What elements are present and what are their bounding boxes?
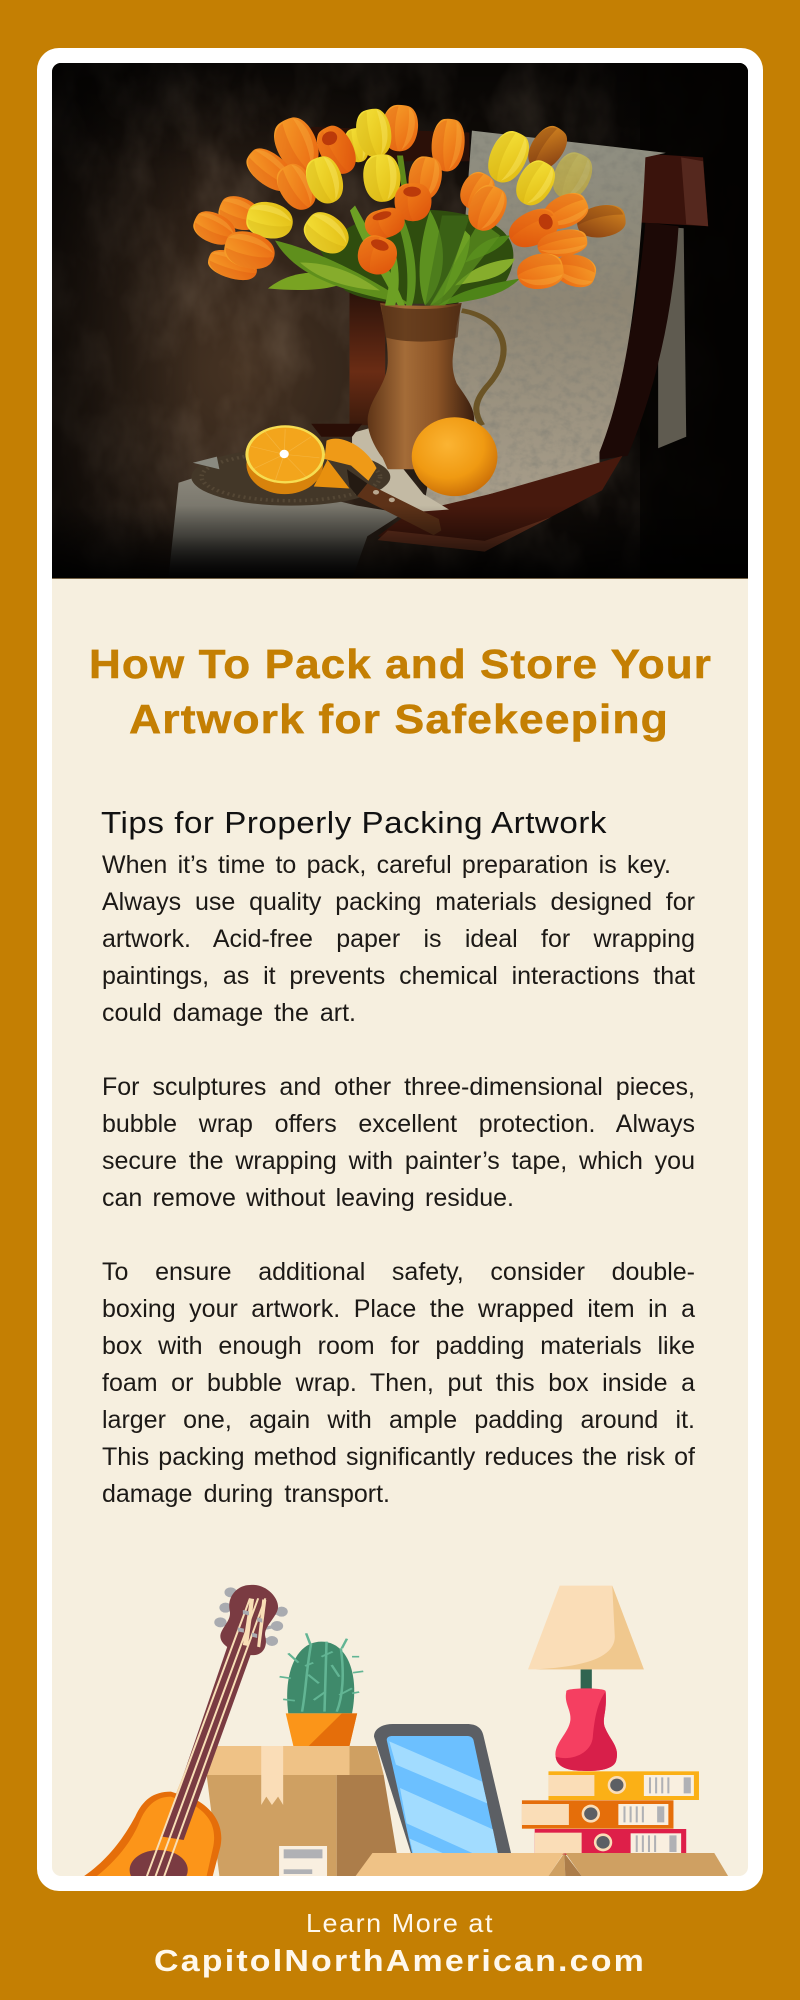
paragraph: sculptures and bubble wrap: bubble wrap offers excellent protection. Always <box>102 1110 695 1138</box>
icon: table lamp <box>528 1586 644 1771</box>
paragraph: packing materials: When it’s time to pack, careful preparation is key. <box>102 851 671 879</box>
title: How To Pack and Store Your <box>89 641 712 687</box>
tulips <box>189 103 628 292</box>
title <box>89 641 712 742</box>
paragraph: packing materials: could damage the art. <box>102 999 356 1027</box>
footer call to action: CapitolNorthAmerican.com <box>154 1943 646 1978</box>
icon: acoustic guitar <box>84 1585 288 1890</box>
cream content panel <box>52 62 748 1876</box>
paragraph: packing materials <box>102 851 695 1027</box>
photo background objects drawn in scaled coordinates <box>168 126 708 579</box>
paragraph: double-boxing: To ensure additional safety, consider double- <box>102 1258 695 1286</box>
paragraph: double-boxing: larger one, again with ample padding around it. <box>102 1406 695 1434</box>
paragraph: double-boxing: boxing your artwork. Place the wrapped item in a <box>102 1295 695 1323</box>
paragraph: sculptures and bubble wrap: For sculptures and other three-dimensional pieces, <box>102 1073 695 1101</box>
paragraph: sculptures and bubble wrap: secure the wrapping with painter’s tape, which you <box>102 1147 695 1175</box>
paragraph: double-boxing: foam or bubble wrap. Then, put this box inside a <box>102 1369 695 1397</box>
hero photo: still life of tulips in a copper jug on a wooden chair <box>52 63 748 579</box>
photo bottom fade <box>52 505 748 580</box>
footer call to action: Learn More at <box>306 1908 494 1938</box>
paragraph: packing materials: Always use quality packing materials designed for <box>102 888 695 916</box>
illustration: household items and moving boxes <box>84 1584 728 1876</box>
paragraph: double-boxing: damage during transport. <box>102 1480 390 1508</box>
icon: open box flaps <box>356 1853 728 1876</box>
cardboard box <box>207 1746 401 1876</box>
title: Artwork for Safekeeping <box>129 696 669 742</box>
paragraph: double-boxing: This packing method significantly reduces the risk of <box>102 1443 695 1471</box>
icon: stack of binders <box>522 1771 699 1855</box>
paragraph: packing materials: paintings, as it prevents chemical interactions that <box>102 962 695 990</box>
paragraph: double-boxing <box>102 1258 696 1508</box>
paragraph: sculptures and bubble wrap: can remove without leaving residue. <box>102 1184 514 1212</box>
stems and leaves <box>268 155 520 305</box>
icon: mirror <box>374 1724 511 1854</box>
footer call to action <box>154 1908 646 1978</box>
paragraph: packing materials: artwork. Acid-free paper is ideal for wrapping <box>102 925 695 953</box>
paragraph: double-boxing: box with enough room for padding materials like <box>102 1332 695 1360</box>
icon: cactus in pot <box>280 1633 363 1746</box>
section heading: Tips for Properly Packing Artwork <box>101 805 607 840</box>
paragraph: sculptures and bubble wrap <box>102 1073 695 1212</box>
